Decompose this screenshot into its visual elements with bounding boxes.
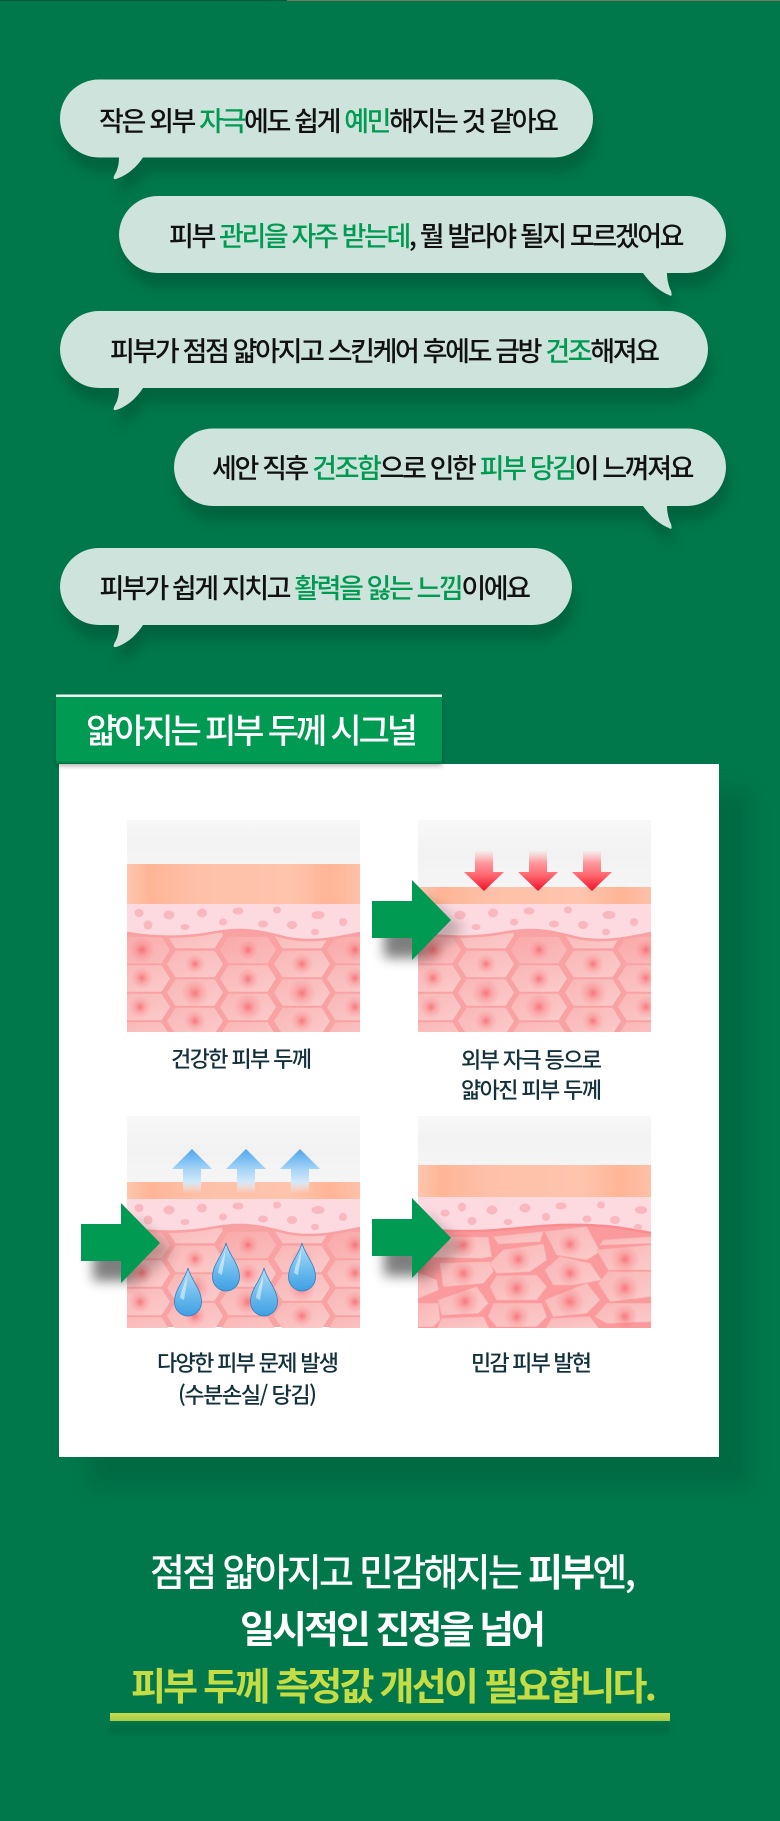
section title tab: 얇아지는 피부 두께 시그널 bbox=[86, 704, 418, 753]
top edge strip bbox=[0, 0, 780, 1]
highlight underline bbox=[110, 1713, 670, 1734]
closing statement: 일시적인 진정을 넘어 bbox=[240, 1599, 546, 1654]
closing statement: 점점 얇아지고 민감해지는 피부엔, bbox=[150, 1542, 636, 1597]
caption: skin problems: 다양한 피부 문제 발생 bbox=[157, 1346, 339, 1378]
caption: thinned skin bbox=[461, 1043, 602, 1105]
skin panel 2: thinned by irritation bbox=[418, 826, 651, 1032]
speech bubble 4 bbox=[174, 428, 729, 544]
green arrow: panel 3 to 4 bbox=[372, 1198, 464, 1284]
caption: sensitive skin: 민감 피부 발현 bbox=[471, 1346, 592, 1378]
section title tab bbox=[56, 694, 442, 766]
speech bubble 5: 피부가 쉽게 지치고 활력을 잃는 느낌이에요 bbox=[100, 567, 531, 606]
green arrow: panel 2 to 3 bbox=[81, 1203, 173, 1289]
white panel: skin thickness signal bbox=[59, 764, 750, 1487]
caption: healthy thickness: 건강한 피부 두께 bbox=[171, 1042, 312, 1074]
closing statement: 피부 두께 측정값 개선이 필요합니다. bbox=[131, 1656, 657, 1711]
speech bubble 3 bbox=[60, 311, 711, 425]
speech bubble 4: 세안 직후 건조함으로 인한 피부 당김이 느껴져요 bbox=[212, 447, 694, 486]
caption: skin problems: (수분손실/ 당김) bbox=[178, 1378, 317, 1410]
skin panel 1: healthy thickness bbox=[127, 824, 360, 1032]
closing statement bbox=[131, 1542, 657, 1711]
skin panel 4: sensitive skin bbox=[418, 1116, 651, 1330]
caption: thinned skin: 얇아진 피부 두께 bbox=[461, 1073, 602, 1105]
speech bubble 3: 피부가 점점 얇아지고 스킨케어 후에도 금방 건조해져요 bbox=[110, 330, 660, 369]
speech bubble 2 bbox=[119, 196, 729, 311]
speech bubble 2: 피부 관리을 자주 받는데, 뭘 발라야 될지 모르겠어요 bbox=[169, 215, 684, 254]
skin panel 3: skin problems bbox=[127, 1122, 360, 1328]
speech bubble 1: 작은 외부 자극에도 쉽게 예민해지는 것 같아요 bbox=[99, 100, 559, 139]
caption: skin problems bbox=[157, 1346, 339, 1410]
speech bubble 5 bbox=[60, 548, 575, 662]
caption: thinned skin: 외부 자극 등으로 bbox=[461, 1043, 602, 1075]
green arrow: panel 1 to 2 bbox=[372, 880, 464, 966]
speech bubble 1 bbox=[60, 80, 596, 194]
